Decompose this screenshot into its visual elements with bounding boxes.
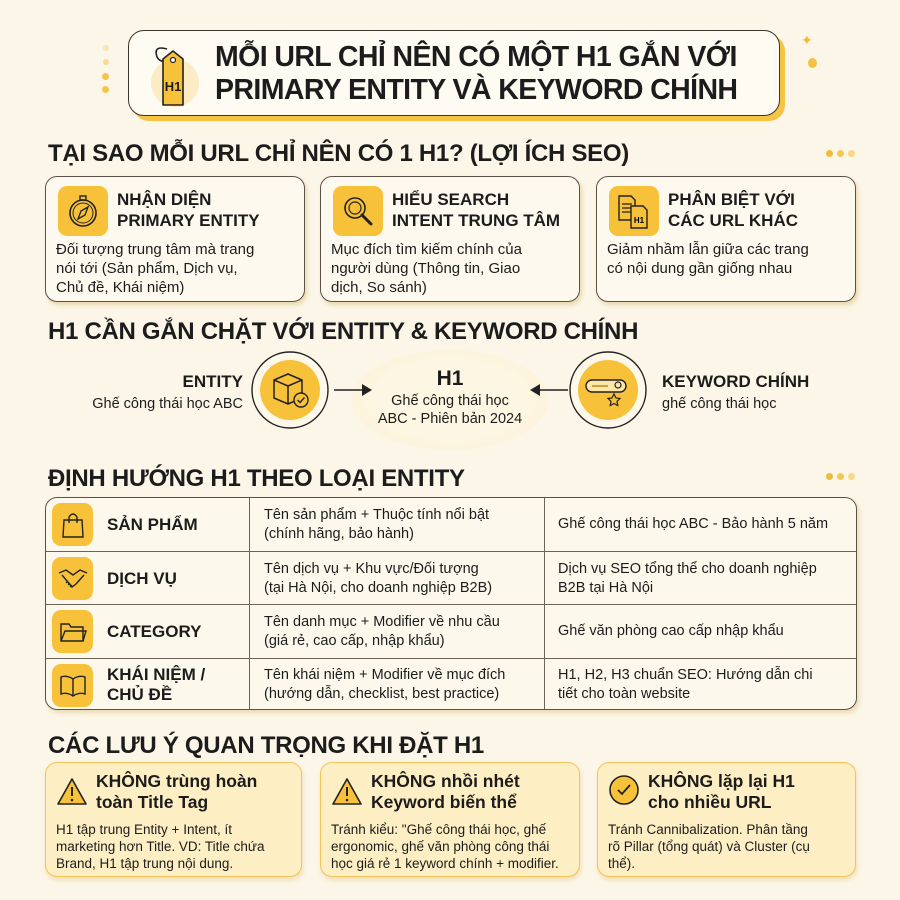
callout: duplicate H1: thể). (608, 856, 635, 871)
entity label (92, 372, 243, 412)
row: concept: CHỦ ĐỀ (107, 685, 172, 704)
heading: why one H1: TẠI SAO MỖI URL CHỈ NÊN CÓ 1 H1? (LỢI ÍCH SEO) (48, 140, 629, 167)
row: concept: H1, H2, H3 chuẩn SEO: Hướng dẫn chi (558, 667, 813, 683)
row: service: DỊCH VỤ (107, 569, 177, 588)
heading: important notes: CÁC LƯU Ý QUAN TRỌNG KHI ĐẶT H1 (48, 732, 484, 759)
arrow left (530, 384, 568, 396)
row: product: Ghế công thái học ABC - Bảo hành 5 năm (558, 516, 828, 532)
keyword label (662, 372, 809, 412)
icon: warning (57, 778, 87, 805)
row: category: Tên danh mục + Modifier về nhu cầu (264, 614, 500, 630)
keyword label: KEYWORD CHÍNH (662, 372, 809, 391)
icon: compass (58, 186, 108, 236)
row: concept: KHÁI NIỆM / (107, 665, 205, 684)
decorative dots left (102, 45, 109, 93)
panel: differentiate: CÁC URL KHÁC (668, 211, 798, 230)
callout: title tag: KHÔNG trùng hoàn (96, 771, 257, 791)
callout: keyword stuffing: Tránh kiểu: "Ghế công thái học, ghế (331, 822, 546, 837)
panel: primary entity: Đối tượng trung tâm mà trang (56, 241, 254, 258)
row: concept (46, 658, 858, 711)
row: product: Tên sản phẩm + Thuộc tính nổi bật (264, 507, 489, 523)
row: concept: (hướng dẫn, checklist, best practice) (264, 686, 499, 702)
icon: check (609, 775, 639, 805)
row: service: B2B tại Hà Nội (558, 580, 653, 596)
callout: title tag: marketing hơn Title. VD: Title chứa (56, 839, 264, 854)
icon: search star circle (569, 351, 647, 429)
panel: differentiate: có nội dung gần giống nhau (607, 260, 792, 277)
icon: warning (332, 778, 362, 805)
callout: title tag: toàn Title Tag (96, 792, 208, 812)
panel: search intent: dịch, So sánh) (331, 279, 427, 296)
callout: keyword stuffing: Keyword biến thể (371, 792, 517, 812)
heading: H1 tied to entity: H1 CẦN GẮN CHẶT VỚI ENTITY & KEYWORD CHÍNH (48, 318, 638, 345)
panel: primary entity: PRIMARY ENTITY (117, 211, 260, 230)
callout: keyword stuffing: KHÔNG nhồi nhét (371, 771, 520, 791)
keyword label: ghế công thái học (662, 396, 776, 412)
icon: documents: H1 (634, 216, 645, 225)
table: entity types (45, 497, 857, 710)
icon: H1 tag (151, 47, 199, 107)
panel: differentiate: Giảm nhầm lẫn giữa các trang (607, 241, 809, 258)
callout: duplicate H1: Tránh Cannibalization. Phân tầng (608, 822, 808, 837)
row: category (46, 604, 858, 658)
callout: duplicate H1: KHÔNG lặp lại H1 (648, 771, 795, 791)
row: category: CATEGORY (107, 622, 201, 641)
panel: search intent (320, 176, 580, 302)
callout: duplicate H1: rõ Pillar (tổng quát) và Cluster (cụ (608, 839, 810, 854)
callout: keyword stuffing: ergonomic, ghế văn phòng công thái (331, 839, 549, 854)
panel: primary entity: nói tới (Sản phẩm, Dịch vụ, (56, 260, 238, 277)
icon: magnifier (333, 186, 383, 236)
row: product (52, 503, 828, 546)
callout: title tag (45, 762, 302, 877)
row: service: Tên dịch vụ + Khu vực/Đối tượng (264, 561, 479, 577)
arrow right (334, 384, 372, 396)
H1 ellipse: Ghế công thái học (391, 393, 509, 409)
row: category: (giá rẻ, cao cấp, nhập khẩu) (264, 633, 445, 649)
row: category: Ghế văn phòng cao cấp nhập khẩu (558, 623, 784, 639)
entity label: Ghế công thái học ABC (92, 396, 243, 412)
callout: keyword stuffing (320, 762, 580, 877)
row: service: (tại Hà Nội, cho doanh nghiệp B2B) (264, 580, 492, 596)
row: concept: tiết cho toàn website (558, 686, 690, 702)
row: service (46, 551, 858, 604)
callout: title tag: Brand, H1 tập trung nội dung. (56, 856, 233, 871)
title text: PRIMARY ENTITY VÀ KEYWORD CHÍNH (215, 74, 737, 106)
title text: MỖI URL CHỈ NÊN CÓ MỘT H1 GẮN VỚI (215, 41, 737, 73)
panel: primary entity: Chủ đề, Khái niệm) (56, 279, 184, 296)
dots (826, 150, 855, 157)
row: concept: Tên khái niệm + Modifier về mục đích (264, 667, 505, 683)
icon: H1 tag: H1 (165, 79, 181, 94)
H1 ellipse (352, 350, 548, 450)
panel: differentiate (596, 176, 856, 302)
panel: differentiate: PHÂN BIỆT VỚI (668, 190, 795, 209)
callout: duplicate H1: cho nhiều URL (648, 792, 771, 812)
icon: documents (609, 186, 659, 236)
decorative sparkle right: ✦ (801, 32, 813, 48)
entity label: ENTITY (183, 372, 243, 391)
icon: box circle (251, 351, 329, 429)
panel: search intent: người dùng (Thông tin, Giao (331, 260, 520, 277)
panel: search intent: INTENT TRUNG TÂM (392, 211, 560, 230)
callout: title tag: H1 tập trung Entity + Intent, ít (56, 822, 232, 837)
panel: search intent: HIỂU SEARCH (392, 190, 509, 209)
title text (215, 40, 737, 106)
callout: duplicate H1 (597, 762, 856, 877)
heading: direction by entity: ĐỊNH HƯỚNG H1 THEO LOẠI ENTITY (48, 465, 465, 492)
panel: primary entity: NHẬN DIỆN (117, 190, 211, 209)
H1 ellipse: ABC - Phiên bản 2024 (378, 411, 522, 427)
H1 ellipse: H1 (437, 367, 463, 390)
panel: primary entity (45, 176, 305, 302)
title box (128, 30, 780, 116)
panel: search intent: Mục đích tìm kiếm chính của (331, 241, 522, 258)
row: product: (chính hãng, bảo hành) (264, 526, 414, 542)
row: product: SẢN PHẨM (107, 515, 198, 534)
diagram: entity - H1 - keyword (92, 350, 809, 450)
callout: keyword stuffing: học giá rẻ 1 keyword chính + modifier. (331, 856, 559, 871)
row: service: Dịch vụ SEO tổng thể cho doanh nghiệp (558, 561, 817, 577)
